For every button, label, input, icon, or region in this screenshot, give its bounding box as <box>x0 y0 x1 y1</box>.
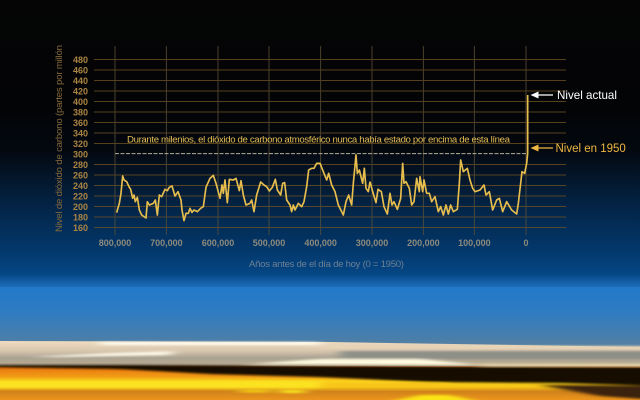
y axis labels: 440 <box>73 76 88 86</box>
x axis labels: 300,000 <box>356 238 388 248</box>
x axis labels: 600,000 <box>202 238 234 248</box>
x axis labels: 100,000 <box>458 238 491 248</box>
y axis labels: 180 <box>73 212 88 222</box>
y axis title: Nivel de dióxido de carbono (partes por millón <box>54 45 65 232</box>
CO2 curve <box>117 95 528 221</box>
y axis labels: 460 <box>73 66 88 76</box>
y axis labels <box>73 55 88 233</box>
arrow: current level <box>530 92 553 98</box>
x axis labels: 700,000 <box>150 238 183 248</box>
threshold dashed line at 300 ppm <box>115 153 527 155</box>
y axis labels: 400 <box>73 97 88 107</box>
y axis labels: 480 <box>73 55 88 65</box>
y axis labels: 320 <box>73 139 88 149</box>
y axis labels: 340 <box>73 128 88 138</box>
y axis labels: 160 <box>73 223 88 233</box>
x axis labels <box>99 238 529 248</box>
y axis labels: 260 <box>73 170 88 180</box>
y axis labels: 360 <box>73 118 88 128</box>
x axis title: Años antes de el día de hoy (0 = 1950) <box>249 259 404 270</box>
arrow: 1950 level <box>530 144 553 152</box>
y axis labels: 300 <box>73 150 88 160</box>
y axis labels: 380 <box>73 108 88 118</box>
annotation: Durante milenios, el dióxido de carbono atmosférico nunca había estado por encima de esta línea <box>127 134 511 146</box>
y axis labels: 220 <box>73 192 88 202</box>
y axis labels: 240 <box>73 181 88 191</box>
y axis labels: 420 <box>73 86 88 96</box>
x axis labels: 500,000 <box>253 238 285 248</box>
chart: carbon dioxide level <box>54 45 566 270</box>
x axis labels: 800,000 <box>99 238 131 248</box>
x axis labels: 0 <box>523 238 529 248</box>
x axis labels: 200,000 <box>407 238 440 248</box>
label: current level: Nivel actual <box>557 89 617 102</box>
grid lines <box>94 46 566 235</box>
y axis labels: 280 <box>73 160 88 170</box>
x axis labels: 400,000 <box>304 238 337 248</box>
label: 1950 level: Nivel en 1950 <box>556 143 626 155</box>
y axis labels: 200 <box>73 202 88 212</box>
